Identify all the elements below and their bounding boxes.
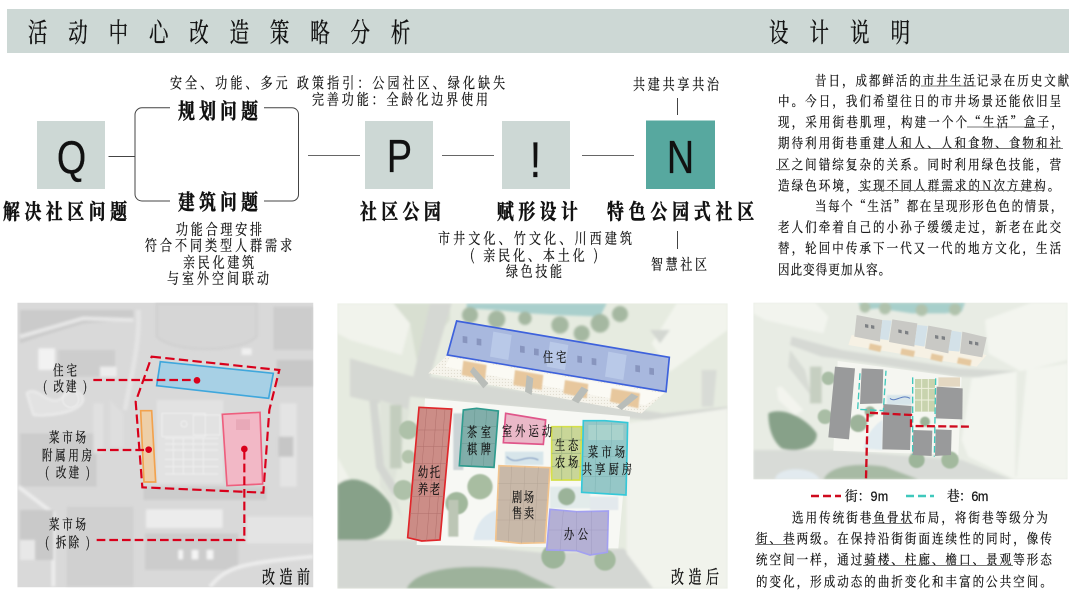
box Q: Q xyxy=(57,131,86,183)
market annex block xyxy=(141,411,156,482)
after panel labels: 棋牌 xyxy=(467,439,491,459)
design description paragraph: 现，采用街巷肌理，构建一个个“生活”盒子， xyxy=(778,112,1063,132)
after panel labels: 茶室 xyxy=(467,422,491,442)
street dashed lines xyxy=(866,413,972,478)
street description paragraph xyxy=(755,507,1052,591)
planning notes: 安全、功能、多元 政策指引：公园社区、绿化缺失 xyxy=(170,70,506,92)
design description paragraph: 老人们牵着自己的小孙子缓缓走过，新老在此交 xyxy=(778,217,1061,237)
housing block xyxy=(157,362,273,398)
street plan base xyxy=(753,302,1068,479)
bold headings xyxy=(3,95,754,226)
building notes: 亲民化建筑 xyxy=(183,250,255,272)
building notes: 与室外空间联动 xyxy=(167,266,269,288)
box P xyxy=(365,121,433,189)
bold headings: 社区公园 xyxy=(360,196,441,226)
before panel labels: 改造前 xyxy=(262,564,310,589)
box exclamation: ! xyxy=(530,132,541,188)
N notes: 共建共享共治 xyxy=(633,72,719,94)
market block xyxy=(222,412,263,486)
housing facade xyxy=(428,355,666,413)
housing zone xyxy=(447,321,669,392)
lane dashed lines xyxy=(858,371,936,457)
zone: outdoor sport xyxy=(503,413,546,444)
building notes xyxy=(145,217,292,288)
legend xyxy=(811,485,988,505)
street paragraph underlines xyxy=(755,524,1013,566)
after panel labels: 室外运动 xyxy=(502,421,552,441)
zone: office xyxy=(547,509,608,555)
bold headings: 建筑问题 xyxy=(178,186,258,216)
QPIN flow diagram xyxy=(3,70,754,288)
form-giving notes: 绿色技能 xyxy=(506,259,562,281)
after panel labels: 生态 xyxy=(555,435,579,455)
before panel labels: 附属用房 xyxy=(42,445,92,465)
bold headings: 特色公园式社区 xyxy=(607,196,754,226)
building notes: 符合不同类型人群需求 xyxy=(145,233,292,255)
design description paragraph: 区之间错综复杂的关系。同时利用绿色技能，营 xyxy=(778,154,1061,174)
before panel labels: ( 改建 ) xyxy=(45,462,90,482)
after panel labels: 菜市场 xyxy=(588,442,625,462)
zone: nursery and elderly care xyxy=(408,407,452,541)
after panel labels xyxy=(418,347,719,589)
zone: tea room and chess xyxy=(459,408,498,467)
design description paragraph: 造绿色环境，实现不同人群需求的N次方建构。 xyxy=(778,175,1059,195)
street description paragraph: 的变化，形成动态的曲折变化和丰富的公共空间。 xyxy=(756,571,1052,591)
street description paragraph: 选用传统街巷鱼骨状布局，将街巷等级分为 xyxy=(792,507,1048,527)
form-giving notes xyxy=(438,226,632,281)
legend: 巷：6m xyxy=(947,485,988,505)
before panel labels: 菜市场 xyxy=(49,514,86,534)
leader lines xyxy=(93,380,244,540)
design description paragraph: 昔日，成都鲜活的市井生活记录在历史文献 xyxy=(815,70,1070,90)
aerial base photo xyxy=(17,303,313,587)
after panel labels: 养老 xyxy=(418,479,440,499)
box N: N xyxy=(667,131,694,183)
housing xyxy=(848,315,987,367)
after panel labels: 农场 xyxy=(555,452,578,472)
before panel labels: 菜市场 xyxy=(49,427,86,447)
site plan base xyxy=(337,303,728,589)
design description paragraph: 中。今日，我们希望往日的市井场景还能依旧呈 xyxy=(778,91,1061,111)
after panel labels: 售卖 xyxy=(512,503,534,523)
after-renovation plan panel xyxy=(337,303,728,589)
before panel labels: ( 拆除 ) xyxy=(45,532,90,552)
title: strategy analysis: 活动中心改造策略分析 xyxy=(28,11,410,50)
leader dots xyxy=(145,377,248,453)
design description paragraph: 因此变得更加从容。 xyxy=(778,259,890,279)
header band xyxy=(7,9,1069,53)
design description paragraph xyxy=(776,70,1070,279)
N notes xyxy=(633,72,719,274)
form-giving notes: ( 亲民化、本土化 ) xyxy=(470,243,598,265)
paragraph underlines xyxy=(776,86,1063,190)
after panel labels: 幼托 xyxy=(418,462,440,482)
title: design notes: 设计说明 xyxy=(769,11,910,50)
legend: 街：9m xyxy=(845,485,888,505)
planning notes: 完善功能：全龄化边界使用 xyxy=(312,87,488,109)
zone: eco farm xyxy=(552,427,582,480)
zone: theatre and retail xyxy=(496,466,550,543)
bold headings: 规划问题 xyxy=(178,95,258,125)
after panel labels: 办公 xyxy=(564,524,588,544)
after panel labels: 住宅 xyxy=(543,347,566,367)
site boundary dashed xyxy=(136,357,279,493)
box exclamation xyxy=(502,121,570,189)
after panel labels: 改造后 xyxy=(671,564,719,589)
planning notes xyxy=(170,70,506,109)
connector lines and bracket xyxy=(108,98,678,249)
design description paragraph: 期待利用街巷重建人和人、人和食物、食物和社 xyxy=(778,133,1061,153)
design description paragraph: 替，轮回中传承下一代又一代的地方文化，生活 xyxy=(778,238,1061,258)
before panel labels: 住宅 xyxy=(53,360,77,380)
after panel labels: 剧场 xyxy=(512,487,534,507)
form-giving notes: 市井文化、竹文化、川西建筑 xyxy=(438,226,632,248)
before-renovation aerial panel xyxy=(17,303,313,589)
box Q xyxy=(37,121,105,189)
box P: P xyxy=(387,130,412,182)
street description paragraph: 统空间一样，通过骑楼、柱廊、檐口、景观等形态 xyxy=(756,549,1052,569)
gray roofs xyxy=(828,367,963,456)
bold headings: 解决社区问题 xyxy=(3,196,127,226)
before panel labels xyxy=(42,360,310,589)
building notes: 功能合理安排 xyxy=(176,217,262,239)
after panel labels: 共享厨房 xyxy=(582,459,632,479)
street network panel xyxy=(753,302,1068,591)
N notes: 智慧社区 xyxy=(651,252,707,274)
zone: market and shared kitchen xyxy=(582,421,628,495)
bold headings: 赋形设计 xyxy=(497,196,578,226)
design description paragraph: 当每个“生活”都在呈现形形色色的情景， xyxy=(815,196,1062,216)
street description paragraph: 街、巷两级。在保持沿街街面连续性的同时，像传 xyxy=(756,528,1052,548)
box N xyxy=(646,120,715,189)
before panel labels: ( 改建 ) xyxy=(43,376,87,396)
